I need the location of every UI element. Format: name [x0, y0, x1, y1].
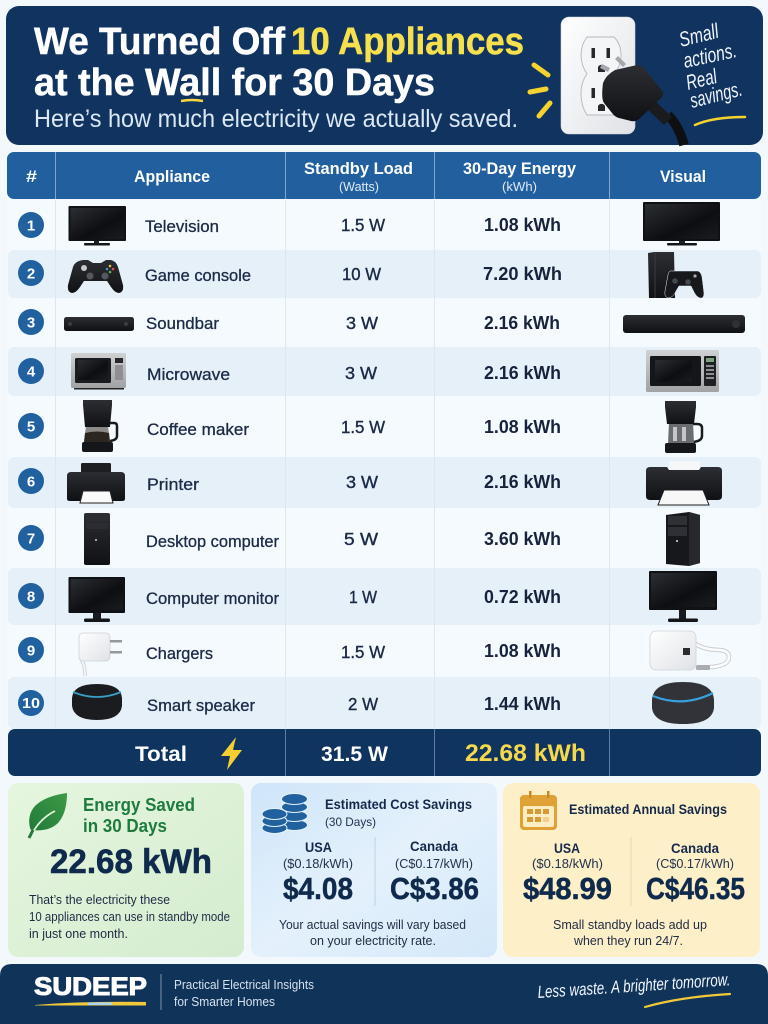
row 9: chargers [18, 631, 729, 676]
icon: charger [79, 633, 122, 676]
panel: estimated cost savings: (C$0.17/kWh) [395, 857, 473, 871]
row 3: soundbar: 3 [27, 314, 35, 332]
subtitle: Here’s how much electricity we actually saved. [34, 105, 518, 133]
handwritten slogan [537, 969, 731, 1007]
row 6: printer [18, 461, 722, 505]
row 8: computer monitor: 1 W [349, 587, 377, 607]
visual: printer [646, 461, 722, 505]
row 5: coffee maker: 5 [27, 418, 35, 436]
icon: monitor [68, 577, 125, 622]
logo: SUDEEP: SUDEEP [34, 973, 147, 1001]
panel: energy saved: That’s the electricity these [29, 893, 170, 907]
icon: lightning bolt [221, 737, 242, 770]
row 2: game console: 7.20 kWh [483, 264, 562, 284]
row 4: microwave: Microwave [147, 366, 230, 384]
icon: soundbar [64, 317, 134, 331]
handwritten note: savings. [688, 78, 745, 113]
row 3: soundbar: 2.16 kWh [484, 313, 560, 333]
row 6: printer: 6 [27, 474, 35, 490]
handwritten note: Real [684, 65, 720, 95]
row 8: computer monitor: 0.72 kWh [484, 587, 561, 607]
total row: 31.5 W [321, 743, 388, 766]
panel: estimated annual savings [503, 783, 760, 957]
row 3: soundbar: 3 W [346, 313, 378, 333]
row 2: game console: 2 [27, 266, 35, 282]
tagline [174, 978, 314, 1009]
row 4: microwave: 4 [27, 364, 36, 380]
icon: coins [262, 794, 308, 834]
row 2: game console: 10 W [342, 264, 381, 284]
row 10: smart speaker: 2 W [348, 694, 378, 714]
row 7: desktop computer: 5 W [344, 529, 379, 549]
table header [7, 152, 761, 199]
panel: energy saved: Energy Saved [83, 795, 195, 815]
panel: estimated annual savings: Small standby loads add up [553, 918, 707, 932]
panel: estimated cost savings: C$3.86 [390, 871, 479, 906]
row 3: soundbar: Soundbar [146, 315, 220, 333]
total row: Total [135, 742, 187, 766]
panel: energy saved: in 30 Days [83, 816, 167, 836]
panel: estimated annual savings: Canada [671, 840, 719, 856]
icon: calendar [520, 791, 557, 830]
table header: 30-Day Energy [463, 160, 577, 178]
row 1: television: 1.08 kWh [484, 215, 561, 235]
row 10: smart speaker: Smart speaker [147, 697, 256, 715]
panel: estimated cost savings: Canada [410, 838, 458, 854]
visual: coffee maker [665, 401, 702, 453]
title: We Turned Off [34, 21, 285, 63]
panel: estimated annual savings: ($0.18/kWh) [532, 857, 603, 871]
icon: microwave [71, 353, 126, 390]
row 3: soundbar [18, 309, 745, 335]
icon: wall outlet with plug [561, 17, 684, 145]
panel: estimated cost savings [251, 783, 497, 957]
panel: estimated cost savings: Your actual savings will vary based [279, 918, 466, 932]
row 6: printer: 3 W [346, 472, 378, 492]
visual: console and controller [648, 252, 704, 298]
row 9: chargers: 9 [27, 642, 35, 660]
handwritten note: Small [677, 20, 722, 52]
icon: gamepad [68, 260, 123, 293]
panel: estimated annual savings: $48.99 [523, 871, 612, 906]
icon: coffee maker [82, 400, 117, 452]
row 1: television: Television [145, 218, 219, 236]
panel: energy saved: 22.68 kWh [50, 843, 212, 881]
row 5: coffee maker [18, 400, 702, 453]
row 5: coffee maker: 1.5 W [341, 417, 385, 437]
row 1: television [18, 202, 720, 246]
icon: spark rays [530, 65, 550, 116]
table header: (kWh) [502, 180, 537, 194]
row 2: game console [18, 252, 704, 298]
visual: smart speaker [652, 682, 714, 724]
row 9: chargers: 1.5 W [341, 642, 385, 662]
icon: printer [67, 463, 125, 503]
row 10: smart speaker: 10 [22, 695, 40, 712]
row 9: chargers: Chargers [146, 645, 213, 663]
row stripes [7, 200, 761, 729]
row 6: printer: Printer [147, 476, 200, 494]
visual: microwave [646, 350, 719, 392]
row 7: desktop computer: 3.60 kWh [484, 529, 561, 549]
panel: energy saved: 10 appliances can use in standby mode [29, 910, 230, 924]
row 10: smart speaker: 1.44 kWh [484, 694, 561, 714]
tagline: for Smarter Homes [174, 995, 275, 1009]
handwritten note [677, 20, 745, 125]
panel: estimated cost savings: Estimated Cost Savings [325, 797, 472, 812]
icon: desktop tower [84, 513, 110, 565]
table header: (Watts) [339, 180, 379, 194]
row 1: television: 1.5 W [341, 215, 385, 235]
row 9: chargers: 1.08 kWh [484, 641, 561, 661]
panel: estimated cost savings: ($0.18/kWh) [283, 857, 353, 871]
row 8: computer monitor: 8 [27, 588, 35, 606]
row 4: microwave: 3 W [345, 363, 377, 383]
row 8: computer monitor [18, 571, 717, 622]
panel: estimated cost savings: (30 Days) [325, 815, 376, 829]
visual: television [643, 202, 720, 246]
handwritten note: actions. [681, 39, 739, 73]
tagline: Practical Electrical Insights [174, 978, 314, 992]
title: 10 Appliances [291, 21, 524, 63]
table header: Standby Load [304, 160, 413, 178]
row 7: desktop computer: 7 [27, 530, 35, 548]
header banner [6, 6, 763, 145]
row 7: desktop computer [18, 512, 700, 566]
row 7: desktop computer: Desktop computer [146, 533, 279, 551]
panel: estimated annual savings: (C$0.17/kWh) [656, 857, 734, 871]
icon: television [68, 206, 126, 246]
row 2: game console: Game console [145, 267, 251, 285]
row 1: television: 1 [27, 218, 35, 234]
visual: charger [650, 631, 729, 670]
row 8: computer monitor: Computer monitor [146, 590, 279, 608]
row 5: coffee maker: Coffee maker [147, 421, 250, 439]
panel: estimated cost savings: on your electricity rate. [310, 934, 436, 948]
total row: 22.68 kWh [465, 740, 586, 767]
panel: estimated cost savings: $4.08 [283, 871, 353, 906]
panel: energy saved: in just one month. [29, 927, 128, 941]
panel: estimated cost savings: USA [305, 839, 332, 855]
footer [0, 964, 768, 1024]
panel: estimated annual savings: when they run 24/7. [573, 934, 683, 948]
table header: # [26, 168, 37, 186]
table header: Appliance [134, 168, 210, 186]
visual: desktop tower [666, 512, 700, 566]
table header: Visual [660, 168, 706, 186]
row 4: microwave: 2.16 kWh [484, 363, 561, 383]
row 5: coffee maker: 1.08 kWh [484, 417, 561, 437]
icon: leaf [29, 793, 67, 838]
title [34, 21, 524, 104]
panel: estimated annual savings: C$46.35 [646, 871, 745, 906]
panel: energy saved [8, 783, 244, 957]
row 6: printer: 2.16 kWh [484, 472, 561, 492]
total row [8, 729, 761, 776]
panel: estimated annual savings: Estimated Annual Savings [569, 802, 727, 817]
row 10: smart speaker [18, 682, 714, 724]
icon: smart speaker [72, 684, 122, 720]
visual: soundbar [623, 315, 745, 333]
row 4: microwave [18, 350, 719, 392]
panel: estimated annual savings: USA [554, 840, 580, 856]
visual: monitor [649, 571, 717, 622]
title: at the Wall for 30 Days [34, 62, 435, 104]
